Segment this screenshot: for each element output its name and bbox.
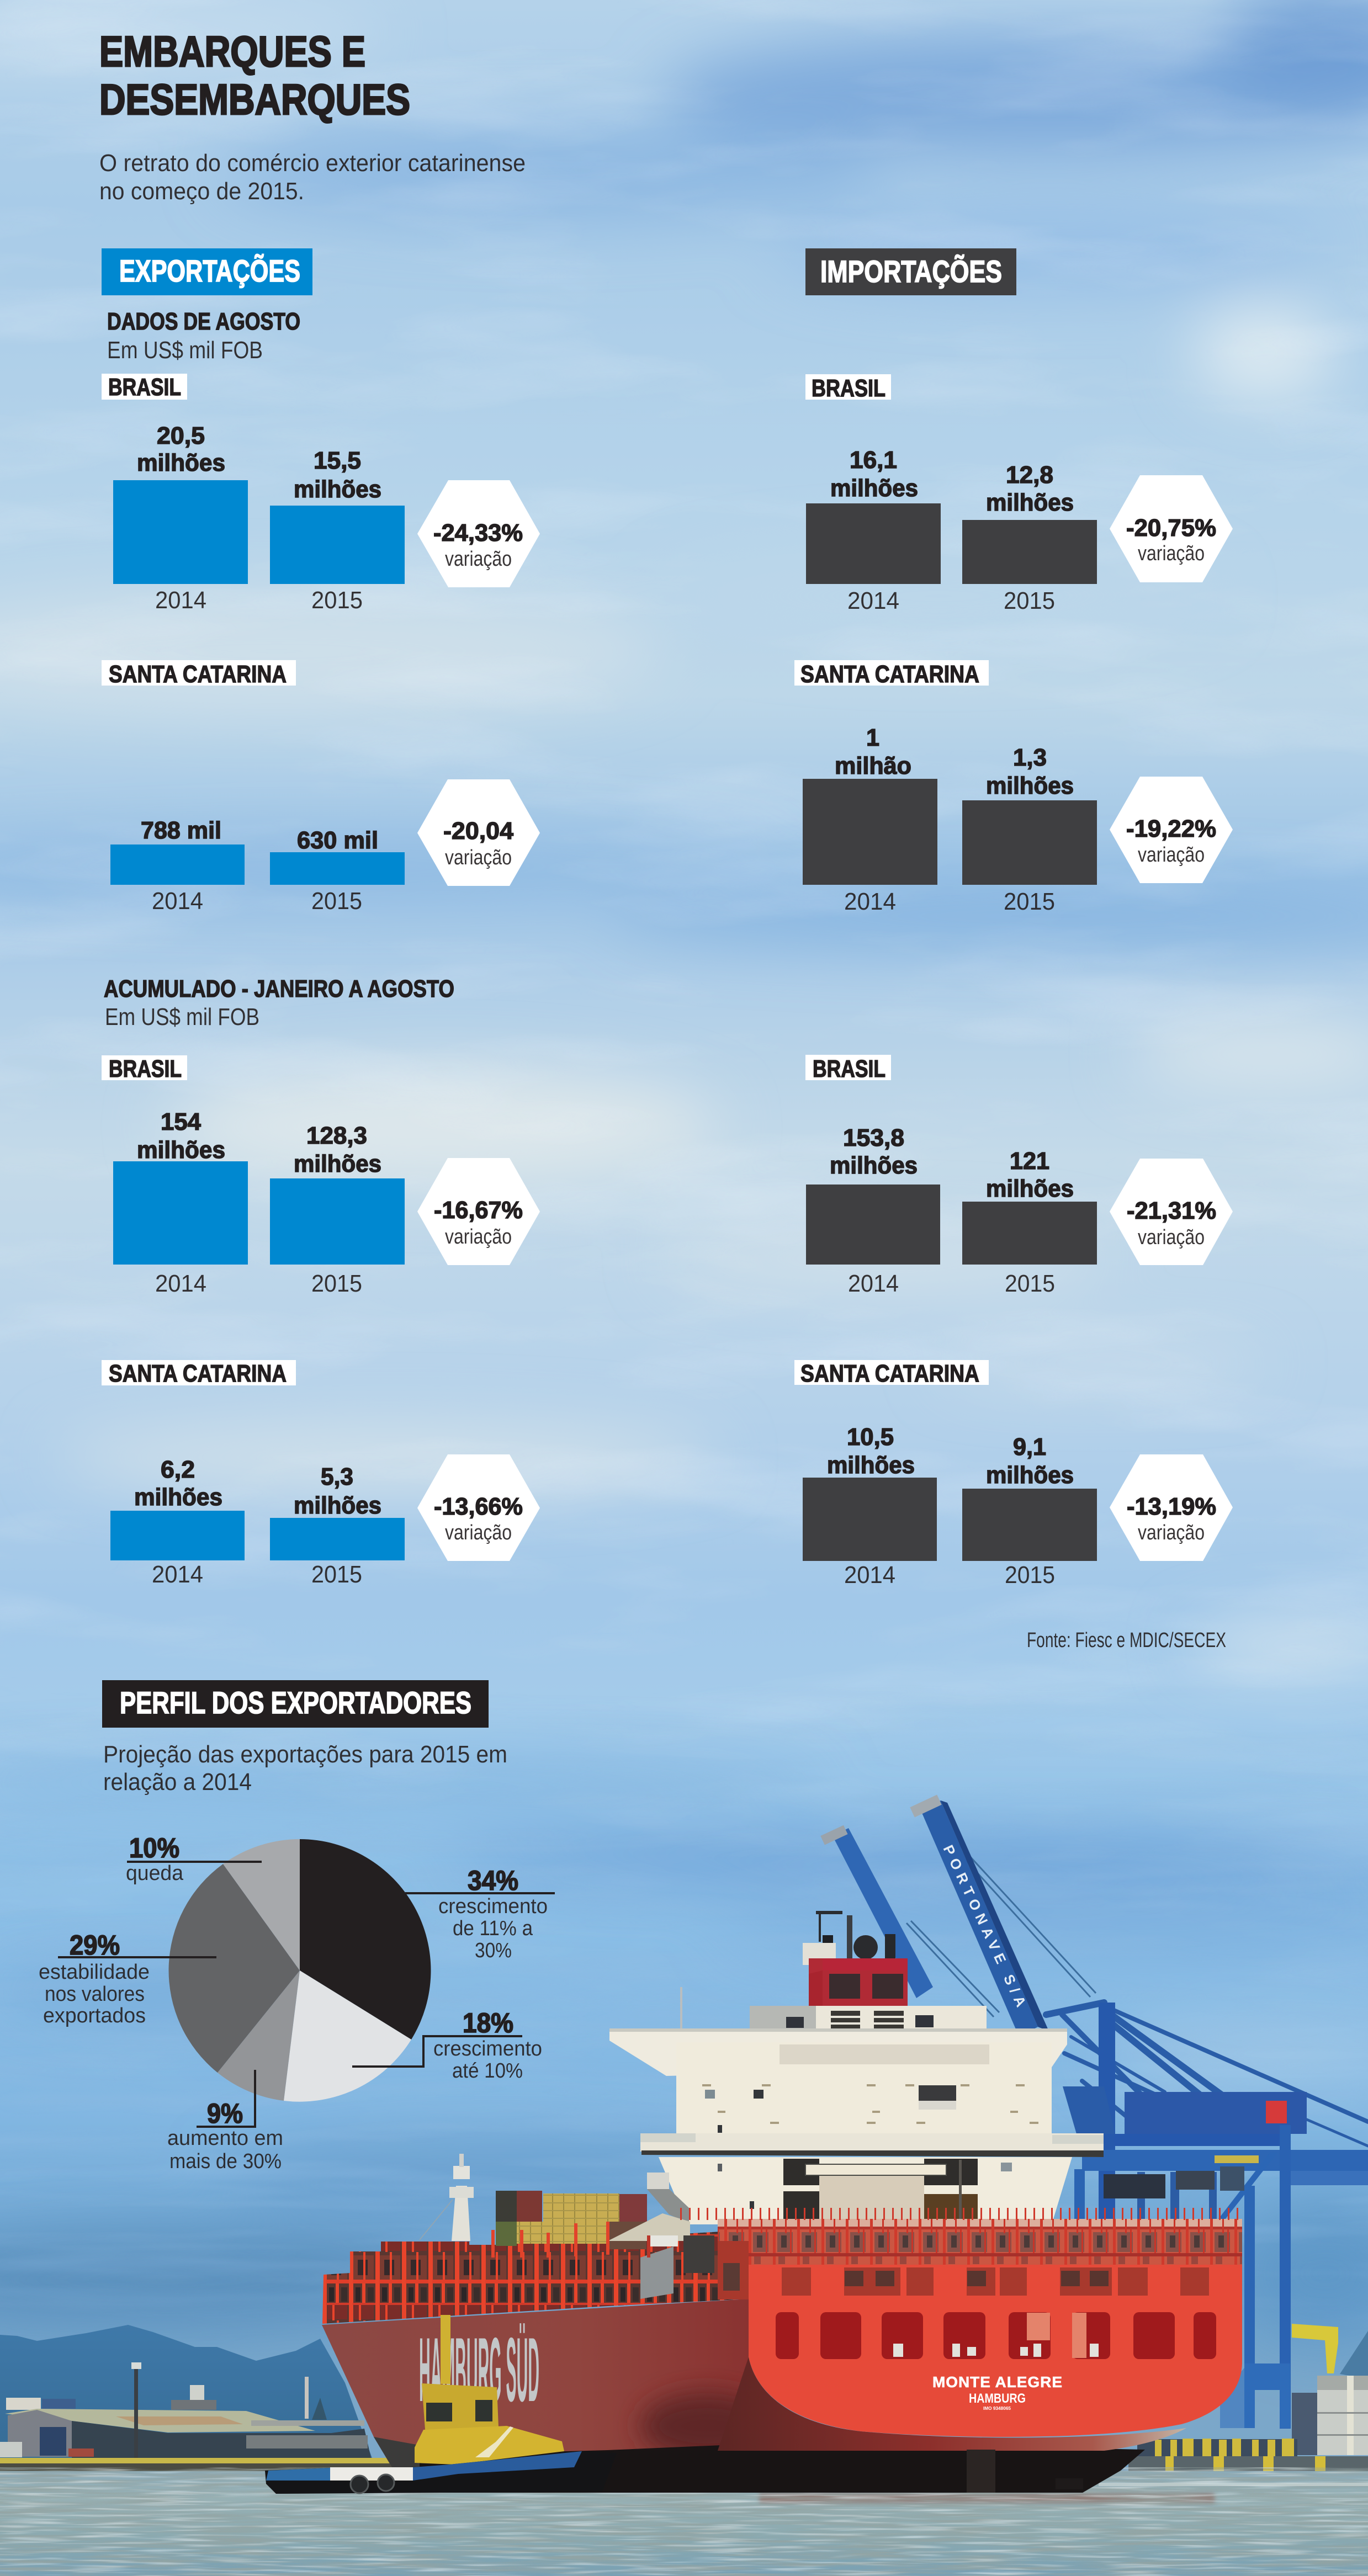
photo: water xyxy=(0,2471,1368,2576)
callout: 9% aumento: mais de 30% xyxy=(169,2150,282,2173)
hexagon: variation: variação xyxy=(445,1521,512,1544)
bar chart: imports santa catarina accumulated xyxy=(803,1424,1233,1589)
bar 2015: 2015 xyxy=(1004,888,1055,915)
bar 2015: 9,1 xyxy=(1013,1433,1046,1460)
hexagon: variation: -16,67% xyxy=(434,1197,523,1224)
bar 2014: milhão xyxy=(835,752,911,779)
slice 34% xyxy=(300,1839,431,2039)
heading: perfil dos exportadores: PERFIL DOS EXPORTADORES xyxy=(120,1685,471,1720)
bar 2014 xyxy=(806,447,941,614)
section heading: acumulado: ACUMULADO - JANEIRO A AGOSTO xyxy=(104,975,454,1002)
callout: 18% crescimento: crescimento xyxy=(433,2037,542,2060)
subtitle: O retrato do comércio exterior catarinense xyxy=(99,150,526,177)
bar 2014: milhões xyxy=(830,1152,918,1179)
bar 2015: milhões xyxy=(294,476,381,503)
mast and radar xyxy=(680,1911,895,2037)
hexagon: variation: -13,19% xyxy=(1127,1493,1216,1520)
bar 2014 xyxy=(806,1124,940,1297)
section heading: acumulado xyxy=(104,975,454,1031)
right quay and containers xyxy=(1128,2324,1368,2474)
hexagon: variation: -20,04 xyxy=(443,817,514,844)
hexagon: variation: -20,75% xyxy=(1126,514,1216,541)
hexagon: variation: -21,31% xyxy=(1127,1197,1216,1224)
hexagon: variation: variação xyxy=(1138,1226,1205,1249)
bar 2015: milhões xyxy=(986,1175,1074,1202)
heading: perfil dos exportadores xyxy=(102,1680,489,1728)
photo: ship hull xyxy=(322,2299,1186,2493)
bar 2014: milhões xyxy=(134,1484,222,1511)
hexagon: variation: -24,33% xyxy=(433,519,523,546)
subtitle xyxy=(99,150,526,205)
crane stays xyxy=(1046,2003,1368,2146)
ship name: MONTE ALEGRE xyxy=(932,2373,1062,2391)
photo: port scenery with mountains and buildings xyxy=(0,2324,1368,2474)
subtitle: projeção xyxy=(103,1741,507,1796)
hexagon: variation xyxy=(1110,475,1233,582)
slice 9% xyxy=(218,1970,300,2101)
upper decks xyxy=(750,2006,987,2037)
hexagon: variation xyxy=(1110,1454,1233,1561)
section heading: dados de agosto xyxy=(107,308,300,364)
photo: stacked containers on deck xyxy=(322,2191,749,2324)
callout: 9% aumento: aumento em xyxy=(167,2127,283,2150)
callout: 34% crescimento: de 11% a xyxy=(453,1917,533,1940)
wing deck xyxy=(609,2028,1067,2076)
bar 2015 xyxy=(962,744,1097,915)
bar 2014: milhões xyxy=(137,1136,225,1164)
bar 2015 xyxy=(962,1148,1097,1297)
bar 2014: 2014 xyxy=(155,587,206,614)
callout: 18% crescimento: 18% xyxy=(463,2007,513,2038)
bar 2015: 1,3 xyxy=(1013,744,1047,771)
heading: importações xyxy=(805,248,1016,295)
bar 2014 xyxy=(803,724,937,915)
bar 2014: 20,5 xyxy=(157,422,205,449)
hexagon: variation: -13,66% xyxy=(434,1493,523,1520)
crane boom front with name xyxy=(910,1795,1049,2037)
hexagon: variation: variação xyxy=(1138,1521,1205,1544)
bar 2014: 2014 xyxy=(155,1270,206,1297)
callout: 34% crescimento xyxy=(405,1865,555,1962)
label: imports santa catarina accumulated: SANTA CATARINA xyxy=(800,1360,979,1387)
label: exports brasil accumulated: BRASIL xyxy=(109,1055,182,1082)
hexagon: variation xyxy=(417,480,540,587)
funnel xyxy=(809,1958,908,2006)
title xyxy=(99,27,410,124)
photo: port cranes xyxy=(820,1795,1368,2429)
main plate xyxy=(640,2133,1104,2157)
section heading: dados de agosto: Em US$ mil FOB xyxy=(107,337,263,364)
label: imports brasil accumulated: BRASIL xyxy=(813,1055,886,1082)
callout: 18% crescimento: até 10% xyxy=(452,2059,523,2083)
heading: importações: IMPORTAÇÕES xyxy=(820,254,1002,289)
label: exports brasil august: BRASIL xyxy=(108,374,181,401)
bar chart: exports santa catarina august xyxy=(110,779,540,915)
callout: 29% estabilidade: 29% xyxy=(70,1930,120,1961)
bar 2015: 5,3 xyxy=(321,1463,353,1490)
hexagon: variation xyxy=(1110,1159,1233,1265)
bar chart: imports brasil august xyxy=(806,447,1233,614)
callout: 29% estabilidade: nos valores xyxy=(45,1983,145,2006)
callout: 29% estabilidade xyxy=(39,1930,216,2027)
hexagon: variation xyxy=(417,1158,540,1265)
hexagon: variation xyxy=(417,1454,540,1561)
bar 2015: 2015 xyxy=(1004,587,1055,614)
callout: 34% crescimento: 30% xyxy=(475,1939,512,1962)
photo: ship superstructure xyxy=(609,1911,1104,2224)
callout: 18% crescimento xyxy=(352,2007,542,2083)
pie chart xyxy=(169,1839,431,2102)
crane boom front with name: PORTONAVE S/A xyxy=(940,1842,1030,2010)
bar 2014: milhões xyxy=(137,449,225,476)
crane cables xyxy=(906,1840,1096,2017)
bridge wing xyxy=(647,2173,669,2189)
photo: ship stern: HAMBURG xyxy=(969,2391,1026,2406)
slice 10% xyxy=(223,1839,300,1970)
bar 2014 xyxy=(113,422,248,614)
bar 2015: milhões xyxy=(986,1462,1074,1489)
bar 2014: 2014 xyxy=(152,888,203,915)
bar 2014 xyxy=(113,1108,248,1297)
callout: 29% estabilidade: exportados xyxy=(43,2004,146,2027)
lower block xyxy=(659,2157,1072,2224)
label: imports brasil august: BRASIL xyxy=(812,375,886,402)
hexagon: variation: variação xyxy=(445,1225,512,1249)
lower windows xyxy=(776,2312,1216,2359)
bar 2015: 2015 xyxy=(1005,1561,1055,1589)
section heading: dados de agosto: DADOS DE AGOSTO xyxy=(107,308,300,335)
bar 2015 xyxy=(270,447,405,614)
bar 2014: 2014 xyxy=(844,888,896,915)
hexagon: variation: variação xyxy=(445,846,512,869)
label: imports santa catarina august: SANTA CATARINA xyxy=(800,661,979,688)
warehouse buildings xyxy=(0,2362,371,2458)
bar 2015 xyxy=(962,461,1097,614)
bar 2015 xyxy=(270,1463,405,1588)
slice 18% xyxy=(284,1970,411,2102)
bar 2014: 2014 xyxy=(847,587,899,614)
callout: 10% queda: queda xyxy=(126,1862,184,1885)
bar 2014 xyxy=(110,817,245,915)
bar 2014: 6,2 xyxy=(161,1456,195,1483)
bar 2014 xyxy=(803,1424,937,1589)
bar 2014: 1 xyxy=(866,724,879,751)
hexagon: variation: variação xyxy=(445,548,512,571)
photo: ship hull: HAMBURG SÜD xyxy=(419,2319,539,2420)
bar 2014 xyxy=(110,1456,245,1588)
section heading: acumulado: Em US$ mil FOB xyxy=(105,1003,259,1031)
label: exports santa catarina accumulated: SANTA CATARINA xyxy=(109,1360,287,1387)
bar 2015: 2015 xyxy=(1005,1270,1055,1297)
bar 2015: 2015 xyxy=(311,587,363,614)
bar 2015: 2015 xyxy=(311,1270,362,1297)
callout: 10% queda xyxy=(126,1833,262,1885)
bar chart: imports brasil accumulated xyxy=(806,1124,1233,1297)
hexagon: variation xyxy=(417,779,540,886)
bar chart: exports santa catarina accumulated xyxy=(110,1454,540,1588)
subtitle: no começo de 2015. xyxy=(99,178,304,205)
bar 2014: 154 xyxy=(161,1108,202,1135)
bar 2014: milhões xyxy=(827,1452,915,1479)
quay xyxy=(0,2458,397,2463)
bar 2015: 2015 xyxy=(311,1561,362,1588)
photo: ship stern xyxy=(749,2265,1242,2437)
slice 29% xyxy=(169,1864,300,2073)
photo: yellow tugboat xyxy=(265,2315,617,2494)
bar 2015: milhões xyxy=(294,1492,381,1519)
middle block xyxy=(676,2042,1052,2136)
heading: exportações: EXPORTAÇÕES xyxy=(119,253,300,288)
bar 2014: 16,1 xyxy=(850,447,897,474)
bar chart: exports brasil august xyxy=(113,422,540,614)
source note: Fonte: Fiesc e MDIC/SECEX xyxy=(1027,1629,1226,1652)
bar 2015: 12,8 xyxy=(1006,461,1053,488)
bar chart: imports santa catarina august xyxy=(803,724,1233,915)
subtitle: projeção: relação a 2014 xyxy=(103,1768,252,1796)
bar 2015: 128,3 xyxy=(306,1122,367,1149)
hexagon: variation xyxy=(1110,777,1233,883)
callout: 9% aumento xyxy=(167,2070,283,2173)
upper openings xyxy=(782,2267,1209,2296)
photo: ship stern: IMO 9348065 xyxy=(983,2406,1011,2411)
callout: 34% crescimento: crescimento xyxy=(438,1895,548,1918)
mountains xyxy=(0,2325,375,2467)
bar 2014: 10,5 xyxy=(847,1424,894,1451)
subtitle: projeção: Projeção das exportações para 2015 em xyxy=(103,1741,507,1768)
callout: 29% estabilidade: estabilidade xyxy=(39,1961,150,1984)
photo: ship mast xyxy=(420,2154,474,2241)
crane main frame xyxy=(1063,2003,1368,2429)
hexagon: variation: variação xyxy=(1138,542,1205,565)
title: EMBARQUES E xyxy=(99,27,365,76)
title: DESEMBARQUES xyxy=(99,75,410,124)
crane boom rear xyxy=(820,1825,933,1998)
bar 2015 xyxy=(270,827,405,915)
hexagon: variation: -19,22% xyxy=(1126,815,1216,842)
bar 2015 xyxy=(270,1122,405,1297)
bar 2014: 153,8 xyxy=(843,1124,904,1151)
bar 2015: 2015 xyxy=(311,888,362,915)
bar 2014: 2014 xyxy=(844,1561,895,1589)
bar chart: exports brasil accumulated xyxy=(113,1108,540,1297)
photo: lashing bridge xyxy=(679,2208,1242,2299)
bar 2015: milhões xyxy=(986,772,1074,799)
bar 2015: milhões xyxy=(294,1150,381,1177)
bar 2015: milhões xyxy=(986,489,1074,516)
bar 2014: 2014 xyxy=(152,1561,203,1588)
callout: 34% crescimento: 34% xyxy=(468,1865,518,1896)
hexagon: variation: variação xyxy=(1138,843,1205,867)
bar 2015: 630 mil xyxy=(297,827,378,854)
callout: 10% queda: 10% xyxy=(129,1833,179,1863)
label: exports santa catarina august: SANTA CATARINA xyxy=(109,661,287,688)
bar 2014: milhões xyxy=(830,475,918,502)
bar 2015: 121 xyxy=(1010,1148,1049,1175)
bar 2014: 2014 xyxy=(848,1270,899,1297)
bar 2015: 15,5 xyxy=(314,447,361,474)
heading: exportações xyxy=(102,248,312,295)
bar 2015 xyxy=(962,1433,1097,1589)
bar 2014: 788 mil xyxy=(141,817,221,844)
callout: 9% aumento: 9% xyxy=(207,2098,243,2129)
